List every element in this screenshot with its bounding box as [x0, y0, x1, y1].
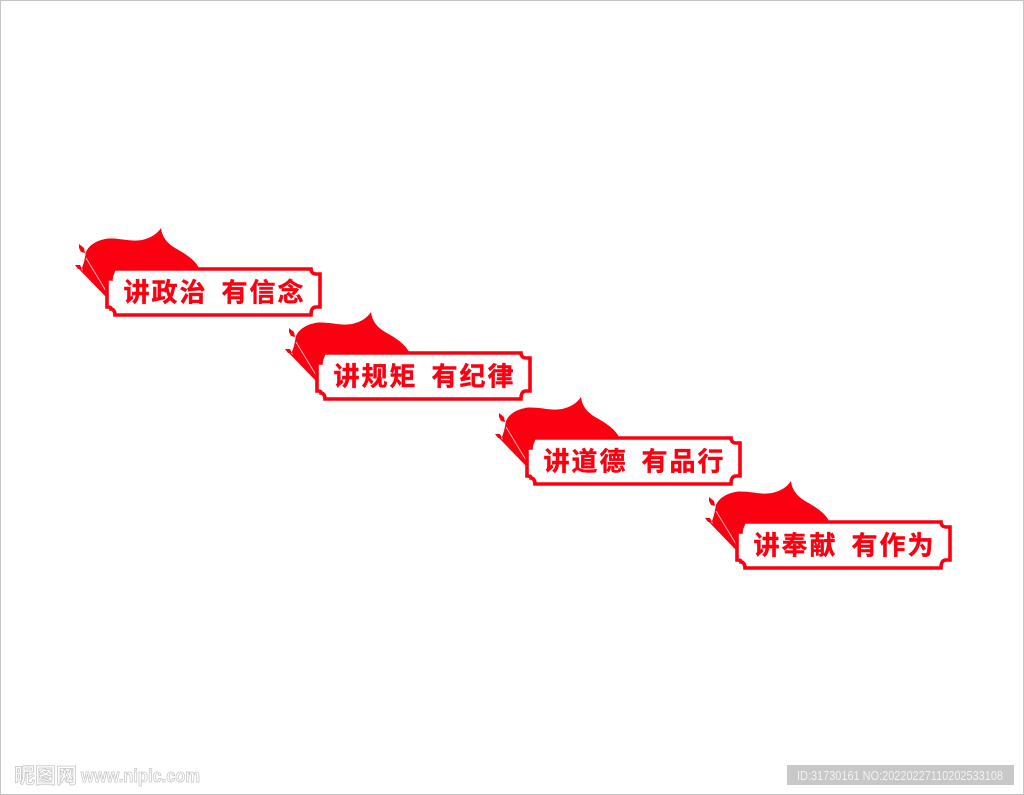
banner: 讲道德 有品行: 有品行 [642, 446, 726, 476]
banner: 讲规矩 有纪律: 有纪律 [432, 362, 516, 392]
watermark: site logo: 昵图网 [14, 765, 77, 788]
icon: red flag 3 [495, 397, 619, 466]
label 3: 讲道德 [544, 446, 628, 476]
banner: 讲道德 有品行 [495, 397, 740, 484]
watermark: site logo: www.nipic.com [80, 766, 200, 786]
banner: 讲规矩 有纪律 [285, 312, 530, 399]
icon: red flag 2 [285, 312, 409, 381]
banner: 讲奉献 有作为: 有作为 [852, 530, 936, 560]
label 1: 讲政治 [124, 278, 208, 308]
watermark: image id bar [787, 765, 1014, 785]
watermark: site logo [14, 765, 200, 788]
icon: red flag 4 [705, 481, 829, 550]
plaque 3 [527, 438, 740, 484]
label 4: 讲奉献 [754, 530, 838, 560]
label 2: 讲规矩 [334, 362, 418, 392]
plaque 1 [107, 269, 320, 315]
banner: 讲政治 有信念 [75, 228, 320, 315]
banner: 讲奉献 有作为 [705, 481, 950, 568]
plaque 2 [317, 353, 530, 399]
plaque 4 [737, 522, 950, 568]
banner: 讲政治 有信念: 有信念 [222, 278, 306, 308]
icon: red flag 1 [75, 228, 199, 297]
